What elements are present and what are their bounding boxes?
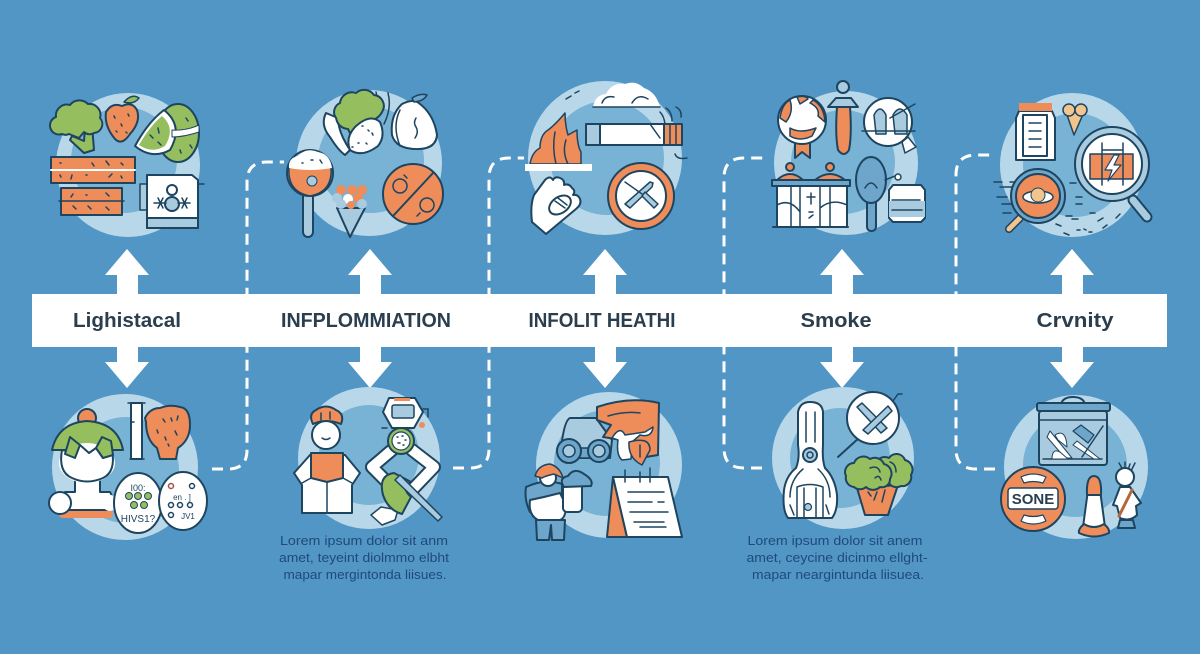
icon: dagger [828, 81, 858, 154]
icon: shelf [525, 164, 592, 171]
text block: lorem right [746, 534, 928, 582]
panel: bottom icon group 2 chef [294, 387, 442, 529]
heading: INFPLOMMIATION: INFPLOMMIATION [281, 310, 451, 332]
icon: orange pelt [145, 406, 190, 459]
heading: Crvnity: Crvnity [1036, 310, 1114, 332]
icon: appliance [140, 175, 204, 228]
icon: smoke wisps [566, 91, 687, 158]
icon: small magnifier [1009, 169, 1065, 229]
icon: right chart oval [159, 472, 207, 530]
icon: right chart oval: JV1 [181, 512, 195, 521]
icon: potted plant [845, 454, 913, 515]
arrows column 4 [820, 249, 864, 388]
icon: gloved hand [531, 177, 580, 234]
panel: bottom icon group 5 signs [1001, 395, 1148, 539]
icon: no sign with crossed tools [608, 163, 674, 229]
heading: Smoke: Smoke [800, 310, 872, 332]
icon: white leaf [324, 113, 350, 155]
icon: flame [530, 113, 581, 164]
arrows column 1 [105, 249, 149, 388]
icon: broccoli [334, 90, 384, 137]
panel: bottom icon group 3 vehicle [526, 392, 682, 540]
panel: bottom icon group 1 person [49, 394, 207, 540]
icon: SONE badge: SONE [1012, 491, 1054, 508]
icon: chef [294, 406, 360, 513]
icon: stacked bricks [51, 157, 135, 215]
dashed connector 3 [724, 158, 764, 468]
icon: large magnifier [1075, 127, 1149, 217]
icon: figure [1113, 462, 1141, 528]
dashed connector 1 [212, 162, 284, 469]
icon: jar [889, 185, 925, 222]
icon: document jar [1016, 103, 1055, 160]
icon: right chart oval: en . ] [173, 493, 191, 502]
icon: calendar sign [607, 468, 682, 537]
heading: INFOLIT HEATHI: INFOLIT HEATHI [528, 310, 676, 332]
panel: top icon group 2 food [287, 90, 443, 237]
icon: strawberry [106, 96, 139, 142]
arrows column 2 [348, 249, 392, 388]
icon: left chart oval [114, 473, 162, 533]
dashed connector 2 [453, 158, 524, 468]
icon: prohibition lens [838, 392, 902, 457]
icon: traffic cone [1079, 476, 1109, 536]
text block: lorem right: mapar neargintunda liisuea. [752, 568, 924, 582]
panel: top icon group 5 inspection [994, 93, 1149, 237]
icon: lime slices [135, 104, 199, 162]
text block: lorem left: mapar mergintonda liisues. [284, 568, 446, 582]
icon: stems [376, 92, 389, 124]
icon: potato [348, 118, 383, 153]
icon: clamp tool [371, 398, 442, 525]
icon: plate [862, 98, 916, 153]
icon: ice cream [1063, 104, 1087, 135]
icon: orange banner with skull [597, 400, 659, 465]
icon: spoon bowl [287, 150, 333, 237]
text block: lorem left [279, 534, 450, 582]
panel: top icon group 1 food [50, 93, 204, 237]
central white band [32, 294, 1167, 347]
arrows column 5 [1050, 249, 1094, 388]
text block: lorem left: Lorem ipsum dolor sit anm [280, 534, 448, 548]
icon: left chart oval: HIVS1? [121, 514, 156, 525]
icon: cigarette [586, 124, 682, 145]
icon: broccoli [50, 100, 102, 153]
icon: person with cup [526, 464, 592, 540]
icon: orange disc [383, 164, 443, 224]
icon: SONE badge [1001, 467, 1065, 531]
panel: top icon group 3 hazards [525, 81, 687, 235]
icon: vehicle [557, 418, 612, 463]
icon: medal globe [778, 96, 826, 158]
icon: test tube [128, 403, 145, 459]
text block: lorem right: amet, ceycine dicinmo ellght- [746, 551, 928, 565]
panel: top icon group 4 objects [772, 81, 925, 235]
dashed connector 4 [956, 155, 995, 469]
icon: person with hat [49, 409, 123, 518]
arrows column 3 [583, 249, 627, 388]
text block: lorem right: Lorem ipsum dolor sit anem [748, 534, 922, 548]
icon: left chart oval: I00: [130, 483, 146, 493]
icon: display case [1037, 397, 1110, 465]
text block: lorem left: amet, teyeint diolmmo elbht [279, 551, 450, 565]
panel: bottom icon group 4 brush [772, 387, 914, 529]
icon: ladle [856, 157, 901, 231]
icon: cloud [593, 83, 660, 107]
icon: cone snack [332, 185, 367, 237]
icon: brush [784, 402, 837, 518]
heading: Lighistacal: Lighistacal [73, 310, 181, 332]
icon: pear [392, 94, 437, 149]
icon: motion dashes [994, 182, 1120, 235]
icon: domed building [772, 163, 850, 227]
